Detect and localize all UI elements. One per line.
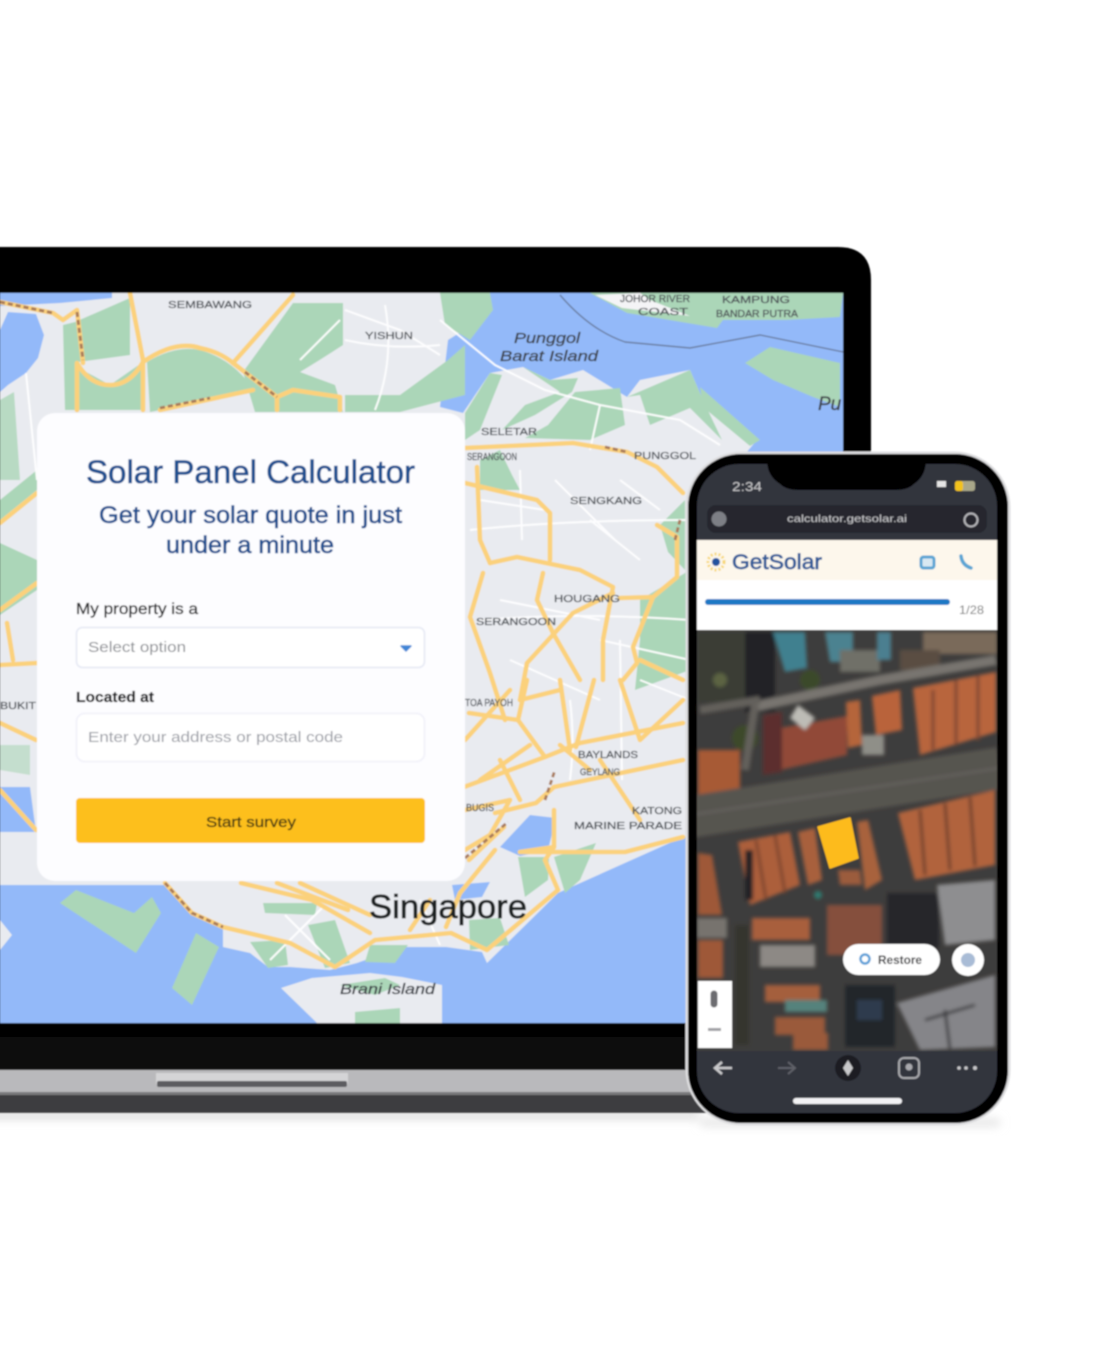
card subtitle: under a minute bbox=[166, 532, 334, 559]
browser address bar bbox=[707, 505, 987, 533]
address input: Enter your address or postal code bbox=[88, 730, 343, 746]
yellow highways bbox=[0, 293, 683, 967]
card subtitle bbox=[99, 502, 402, 559]
address input bbox=[76, 714, 424, 762]
card subtitle: Get your solar quote in just bbox=[99, 502, 402, 529]
map place labels: SELETAR bbox=[481, 426, 537, 438]
browser address bar: calculator.getsolar.ai bbox=[787, 513, 907, 525]
map island labels: Brani Island bbox=[340, 981, 436, 998]
status bar: 2:34 bbox=[732, 479, 762, 494]
phone silver frame bbox=[686, 452, 1010, 1126]
satellite view bbox=[690, 630, 1000, 1051]
page header bbox=[697, 540, 997, 631]
phone icon bbox=[961, 556, 971, 568]
map island labels: Barat Island bbox=[500, 348, 599, 365]
label: Singapore: Singapore bbox=[369, 888, 527, 925]
logo: GetSolar bbox=[732, 551, 822, 574]
browser toolbar icons bbox=[715, 1055, 977, 1081]
map place labels bbox=[0, 293, 798, 832]
map island labels: Pu bbox=[818, 394, 842, 415]
progress bar: 1/28 bbox=[959, 603, 984, 617]
map place labels: KATONG bbox=[632, 805, 682, 817]
upper roofs bbox=[780, 716, 847, 770]
calendar icon bbox=[921, 557, 934, 568]
card title: Solar Panel Calculator bbox=[86, 454, 415, 490]
lower roofs bbox=[738, 832, 800, 905]
map of Singapore bbox=[0, 293, 843, 1023]
map place labels: HOUGANG bbox=[554, 593, 620, 605]
map place labels: MARINE PARADE bbox=[574, 820, 682, 832]
main road bbox=[690, 768, 1000, 817]
laptop base bbox=[0, 1068, 710, 1113]
map place labels: KAMPUNG bbox=[722, 294, 790, 306]
map island labels: Punggol bbox=[514, 330, 581, 347]
selected roof highlight bbox=[818, 818, 858, 868]
upper street bbox=[753, 660, 996, 707]
map place labels: BANDAR PUTRA bbox=[716, 308, 798, 320]
zoom control bbox=[698, 981, 732, 1048]
field label: property: My property is a bbox=[76, 601, 198, 618]
phone screen dark chrome bbox=[697, 464, 997, 1113]
laptop shadow bbox=[0, 1112, 700, 1118]
map place labels: GEYLANG bbox=[580, 767, 620, 777]
grey buildings bbox=[937, 880, 995, 945]
restore button bbox=[843, 944, 940, 975]
brown toll segments bbox=[0, 302, 680, 927]
map place labels: BAYLANDS bbox=[578, 749, 638, 761]
round map button bbox=[952, 944, 984, 976]
green areas bbox=[0, 293, 843, 1023]
start survey button bbox=[76, 798, 425, 843]
start survey button: Start survey bbox=[206, 814, 297, 831]
card background bbox=[37, 413, 465, 881]
map place labels: TOA PAYOH bbox=[465, 697, 513, 709]
map place labels: SENGKANG bbox=[570, 495, 642, 507]
status bar bbox=[732, 479, 975, 494]
smartphone bbox=[686, 452, 1010, 1126]
restore button: Restore bbox=[878, 953, 922, 967]
field label: location: Located at bbox=[76, 690, 154, 706]
map place labels: YISHUN bbox=[365, 330, 413, 342]
small islands bbox=[281, 973, 442, 1023]
map place labels: BUKIT bbox=[0, 700, 37, 712]
map place labels: SERANGOON bbox=[467, 451, 517, 463]
map place labels: SERANGOON bbox=[476, 616, 556, 628]
map island labels bbox=[340, 330, 842, 998]
progress bar bbox=[705, 599, 984, 617]
water bbox=[0, 293, 843, 1023]
map place labels: JOHOR RIVER bbox=[620, 293, 690, 305]
phone black body bbox=[688, 454, 1008, 1123]
white minor roads bbox=[26, 305, 720, 960]
home indicator bbox=[793, 1098, 902, 1104]
phone shadow bbox=[700, 1120, 1000, 1125]
select field: Select option bbox=[88, 640, 186, 656]
device mockup illustration bbox=[0, 247, 1010, 1126]
map place labels: BUGIS bbox=[466, 802, 494, 814]
map place labels: SEMBAWANG bbox=[168, 299, 252, 311]
notch bbox=[767, 460, 926, 490]
calculator form card bbox=[37, 413, 465, 881]
laptop bbox=[0, 247, 871, 1118]
select field bbox=[76, 628, 424, 668]
shadows and dark areas bbox=[887, 893, 939, 948]
water border lines bbox=[560, 295, 843, 352]
map place labels: COAST bbox=[638, 306, 689, 318]
map place labels: PUNGGOL bbox=[634, 450, 696, 462]
laptop lid bezel bbox=[0, 247, 871, 1070]
